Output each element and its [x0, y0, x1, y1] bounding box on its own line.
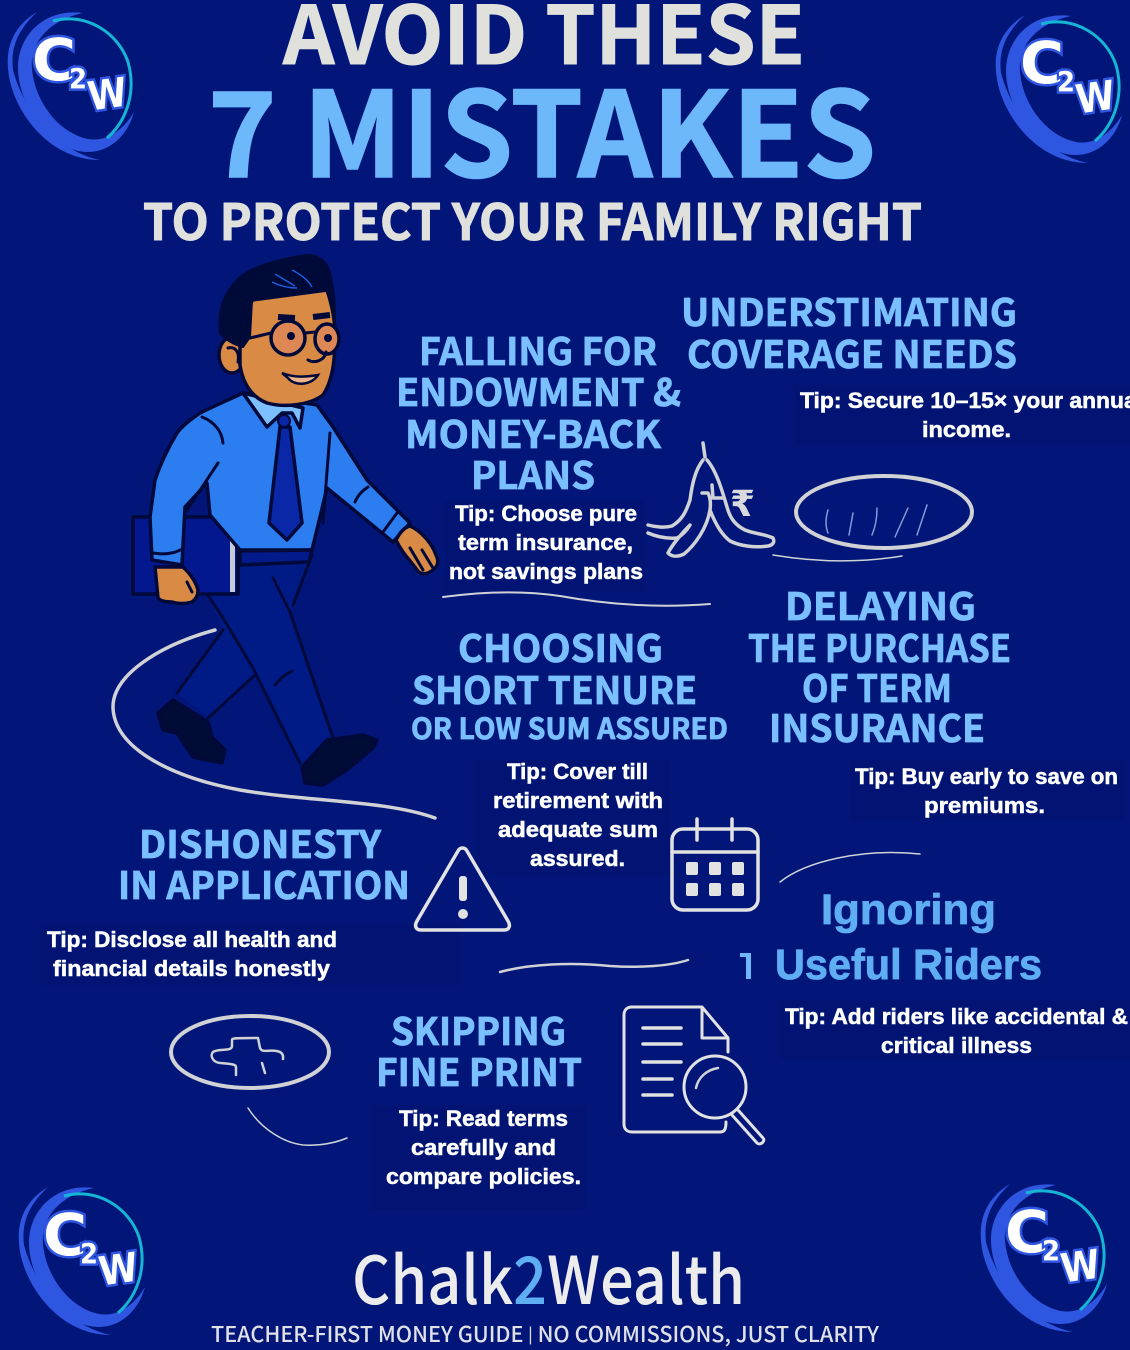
brand wordmark: Chalk2Wealth	[352, 1228, 745, 1324]
tip: cover till retirement	[493, 759, 663, 871]
logo: bottom right: C	[1005, 1198, 1049, 1266]
tip: term insurance	[449, 501, 643, 584]
tip: buy early: premiums.	[924, 793, 1045, 818]
icon: warning triangle	[416, 848, 509, 930]
logo: bottom right: W	[1058, 1242, 1103, 1293]
tip: read terms: compare policies.	[386, 1164, 581, 1189]
tip: add riders: critical illness	[881, 1033, 1032, 1058]
tip: cover till retirement: adequate sum	[498, 817, 658, 842]
logo: top right	[996, 15, 1122, 163]
icon: ellipse with medical cross	[171, 1016, 329, 1088]
illustration: walking man	[133, 255, 438, 785]
heading: delaying term insurance: DELAYING	[785, 576, 976, 631]
heading: delaying term insurance: THE PURCHASE	[748, 618, 1011, 673]
logo: top left	[8, 12, 134, 160]
tagline: |	[528, 1321, 533, 1345]
tagline: TEACHER-FIRST MONEY GUIDE	[211, 1317, 529, 1349]
tip: term insurance: not savings plans	[449, 559, 643, 584]
icon: banana peel with rupee: ₹	[730, 484, 755, 525]
tip: disclose details: Tip: Disclose all health and	[47, 927, 337, 952]
heading: ignoring useful riders: Ignoring	[821, 886, 996, 934]
tip: buy early	[855, 764, 1118, 818]
mark: stray blue tick	[740, 953, 751, 979]
heading: understimating coverage needs	[681, 282, 1017, 379]
heading: falling for endowment: MONEY-BACK	[405, 404, 662, 459]
tip: cover till retirement: assured.	[530, 846, 625, 871]
logo: top left: W	[85, 70, 130, 121]
curve: under ellipse	[773, 555, 902, 561]
heading: understimating coverage needs: COVERAGE NEEDS	[687, 324, 1017, 379]
heading: choosing short tenure: CHOOSING	[458, 618, 663, 673]
title: 7 MISTAKES	[208, 40, 876, 211]
curve: divider under tip	[443, 592, 710, 606]
icon: empty ellipse coverage gap	[796, 476, 972, 548]
tip: disclose details: financial details honestly	[53, 956, 331, 981]
heading: choosing short tenure: SHORT TENURE	[412, 660, 697, 715]
logo: top right: C	[1020, 29, 1064, 97]
heading: dishonesty in application: DISHONESTY	[139, 814, 382, 869]
heading: delaying term insurance: INSURANCE	[769, 698, 985, 753]
title	[143, 0, 922, 255]
logo: bottom left: 2	[80, 1237, 98, 1270]
tip: read terms: carefully and	[411, 1135, 556, 1160]
curve: center divider	[500, 960, 688, 972]
heading: falling for endowment: ENDOWMENT &	[396, 362, 681, 417]
logo: top right: W	[1073, 73, 1118, 124]
heading: ignoring useful riders	[775, 886, 1042, 989]
logo: top right: 2	[1057, 65, 1075, 98]
curve: above ignoring riders	[780, 853, 920, 882]
tip: read terms: Tip: Read terms	[399, 1106, 568, 1131]
tip: annual income: Tip: Secure 10–15× your annual	[800, 388, 1130, 413]
tip: cover till retirement: retirement with	[493, 788, 663, 813]
heading: choosing short tenure: OR LOW SUM ASSURED	[411, 706, 728, 748]
curve: path around the man	[113, 630, 435, 818]
heading: skipping fine print	[376, 1001, 582, 1097]
tip: read terms	[386, 1106, 581, 1189]
logo: bottom left: W	[96, 1245, 141, 1296]
tip: term insurance: Tip: Choose pure	[455, 501, 637, 526]
heading: delaying term insurance	[748, 576, 1011, 753]
logo: top left: 2	[69, 62, 87, 95]
heading: falling for endowment: FALLING FOR	[419, 321, 657, 376]
logo: bottom left: C	[43, 1201, 87, 1269]
heading: understimating coverage needs: UNDERSTIMATING	[681, 282, 1017, 337]
tip: buy early: Tip: Buy early to save on	[855, 764, 1118, 789]
logo: bottom left	[19, 1187, 145, 1335]
tip: add riders	[785, 1004, 1128, 1058]
heading: falling for endowment: PLANS	[471, 445, 595, 500]
tip: cover till retirement: Tip: Cover till	[507, 759, 648, 784]
logo: top left: C	[32, 26, 76, 94]
tagline: NO COMMISSIONS, JUST CLARITY	[533, 1317, 880, 1349]
tip: add riders: Tip: Add riders like accidental &	[785, 1004, 1128, 1029]
icon: banana peel with rupee	[648, 443, 774, 556]
tip: term insurance: term insurance,	[458, 530, 633, 555]
tip: annual income	[800, 388, 1130, 442]
tip: disclose details	[47, 927, 337, 981]
heading: ignoring useful riders: Useful Riders	[775, 941, 1042, 989]
logo: bottom right	[981, 1184, 1107, 1332]
heading: skipping fine print: SKIPPING	[391, 1001, 566, 1056]
heading: falling for endowment	[396, 321, 681, 500]
heading: dishonesty in application: IN APPLICATION	[118, 855, 410, 910]
logo: bottom right: 2	[1042, 1234, 1060, 1267]
heading: dishonesty in application	[118, 814, 410, 910]
icon: document with magnifier	[624, 1007, 764, 1144]
title: TO PROTECT YOUR FAMILY RIGHT	[143, 183, 922, 255]
heading: skipping fine print: FINE PRINT	[376, 1042, 582, 1097]
curve: below cross	[248, 1108, 347, 1145]
heading: choosing short tenure	[411, 618, 728, 748]
icon: calendar	[672, 819, 758, 910]
heading: delaying term insurance: OF TERM	[802, 658, 952, 713]
tip: annual income: income.	[922, 417, 1011, 442]
